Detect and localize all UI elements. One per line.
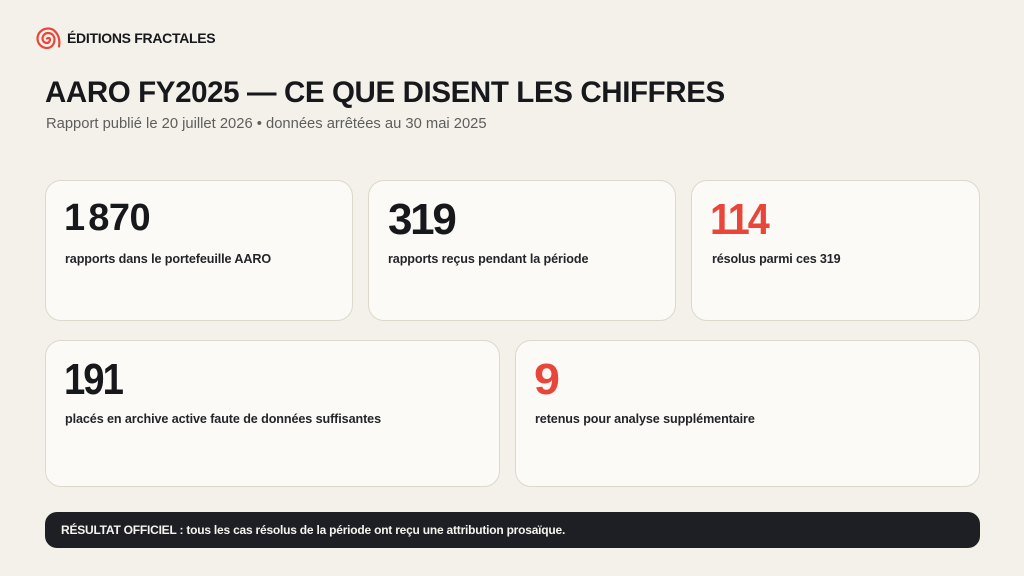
number: 114 (710, 195, 768, 244)
banner text: RÉSULTAT OFFICIEL : tous les cas résolus de la période ont reçu une attribution prosaïque. (61, 523, 565, 537)
card: archive (45, 340, 500, 487)
card: received (368, 180, 676, 321)
label: rapports reçus pendant la période (388, 252, 588, 266)
result banner (45, 512, 980, 548)
logo (36, 27, 60, 49)
title: AARO FY2025 — CE QUE DISENT LES CHIFFRES (45, 76, 725, 109)
number: 319 (388, 195, 455, 244)
label: résolus parmi ces 319 (712, 252, 840, 266)
label: placés en archive active faute de données suffisantes (65, 412, 381, 426)
label: retenus pour analyse supplémentaire (535, 412, 755, 426)
card: further analysis (515, 340, 980, 487)
card: resolved (691, 180, 980, 321)
brand name: ÉDITIONS FRACTALES (67, 30, 215, 46)
number: 191 (64, 355, 122, 404)
number: 9 (534, 355, 558, 404)
subtitle: Rapport publié le 20 juillet 2026 • données arrêtées au 30 mai 2025 (46, 116, 487, 132)
label: rapports dans le portefeuille AARO (65, 252, 271, 266)
number: 1 870 (64, 197, 150, 239)
card: portfolio (45, 180, 353, 321)
